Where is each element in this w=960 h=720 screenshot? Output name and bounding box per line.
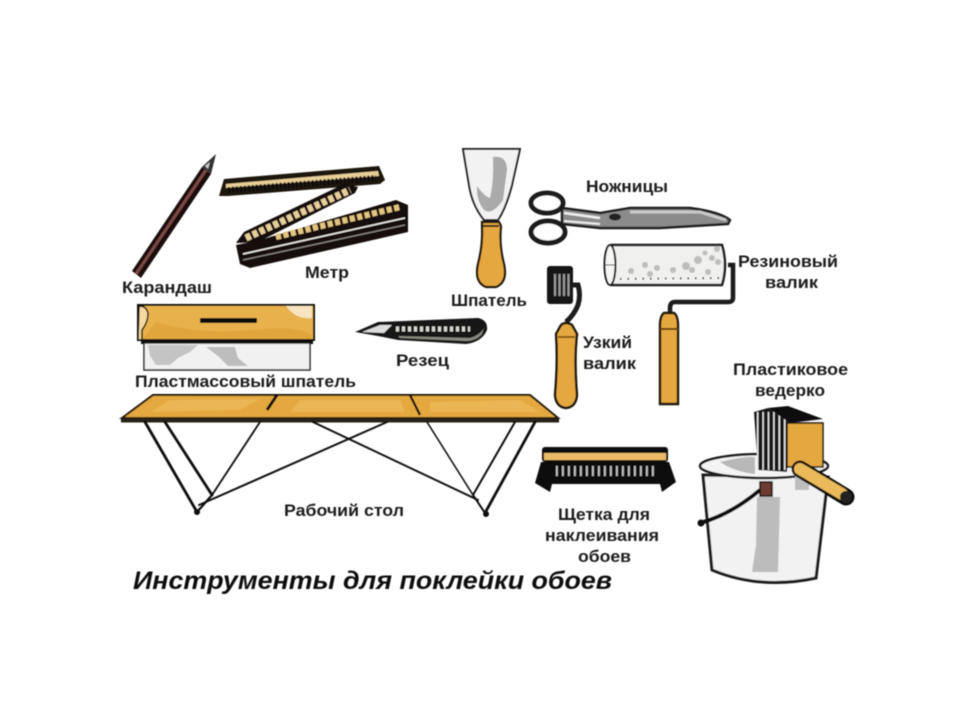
- label: plastic bucket: ведерко: [755, 381, 825, 400]
- label: work table: Рабочий стол: [284, 501, 404, 520]
- label: plastic bucket: [733, 360, 848, 400]
- icon: scissors: [531, 193, 730, 243]
- label: rubber roller: [738, 252, 838, 292]
- label: ruler: Метр: [305, 263, 349, 282]
- label: narrow roller: валик: [583, 354, 637, 373]
- label: pencil: Карандаш: [122, 278, 212, 297]
- label: rubber roller: валик: [765, 273, 819, 292]
- label: wallpaper brush: [545, 505, 659, 566]
- label: wallpaper brush: обоев: [578, 547, 631, 566]
- icon: bucket with brush: [698, 406, 852, 582]
- label: cutter knife: Резец: [396, 351, 450, 370]
- label: wallpaper brush: наклеивания: [545, 526, 659, 545]
- icon: putty knife: [463, 149, 520, 287]
- icon: rubber roller: [604, 245, 733, 404]
- icon: work table: [121, 395, 559, 517]
- label: plastic bucket: Пластиковое: [733, 360, 848, 379]
- label: scissors: Ножницы: [586, 177, 668, 196]
- icon: narrow roller: [547, 266, 580, 408]
- label: narrow roller: [583, 333, 637, 373]
- icon: cutter knife: [355, 318, 487, 344]
- icon: folding ruler: [219, 166, 408, 268]
- label: narrow roller: Узкий: [583, 333, 632, 352]
- title: Инструменты для поклейки обоев: [133, 567, 612, 595]
- label: wallpaper brush: Щетка для: [558, 505, 650, 524]
- icon: pencil: [132, 154, 216, 278]
- label: rubber roller: Резиновый: [738, 252, 838, 271]
- icon: plastic spatula: [138, 305, 314, 370]
- label: putty knife: Шпатель: [451, 291, 527, 310]
- label: plastic spatula: Пластмассовый шпатель: [135, 372, 356, 391]
- icon: wallpaper brush: [535, 447, 676, 492]
